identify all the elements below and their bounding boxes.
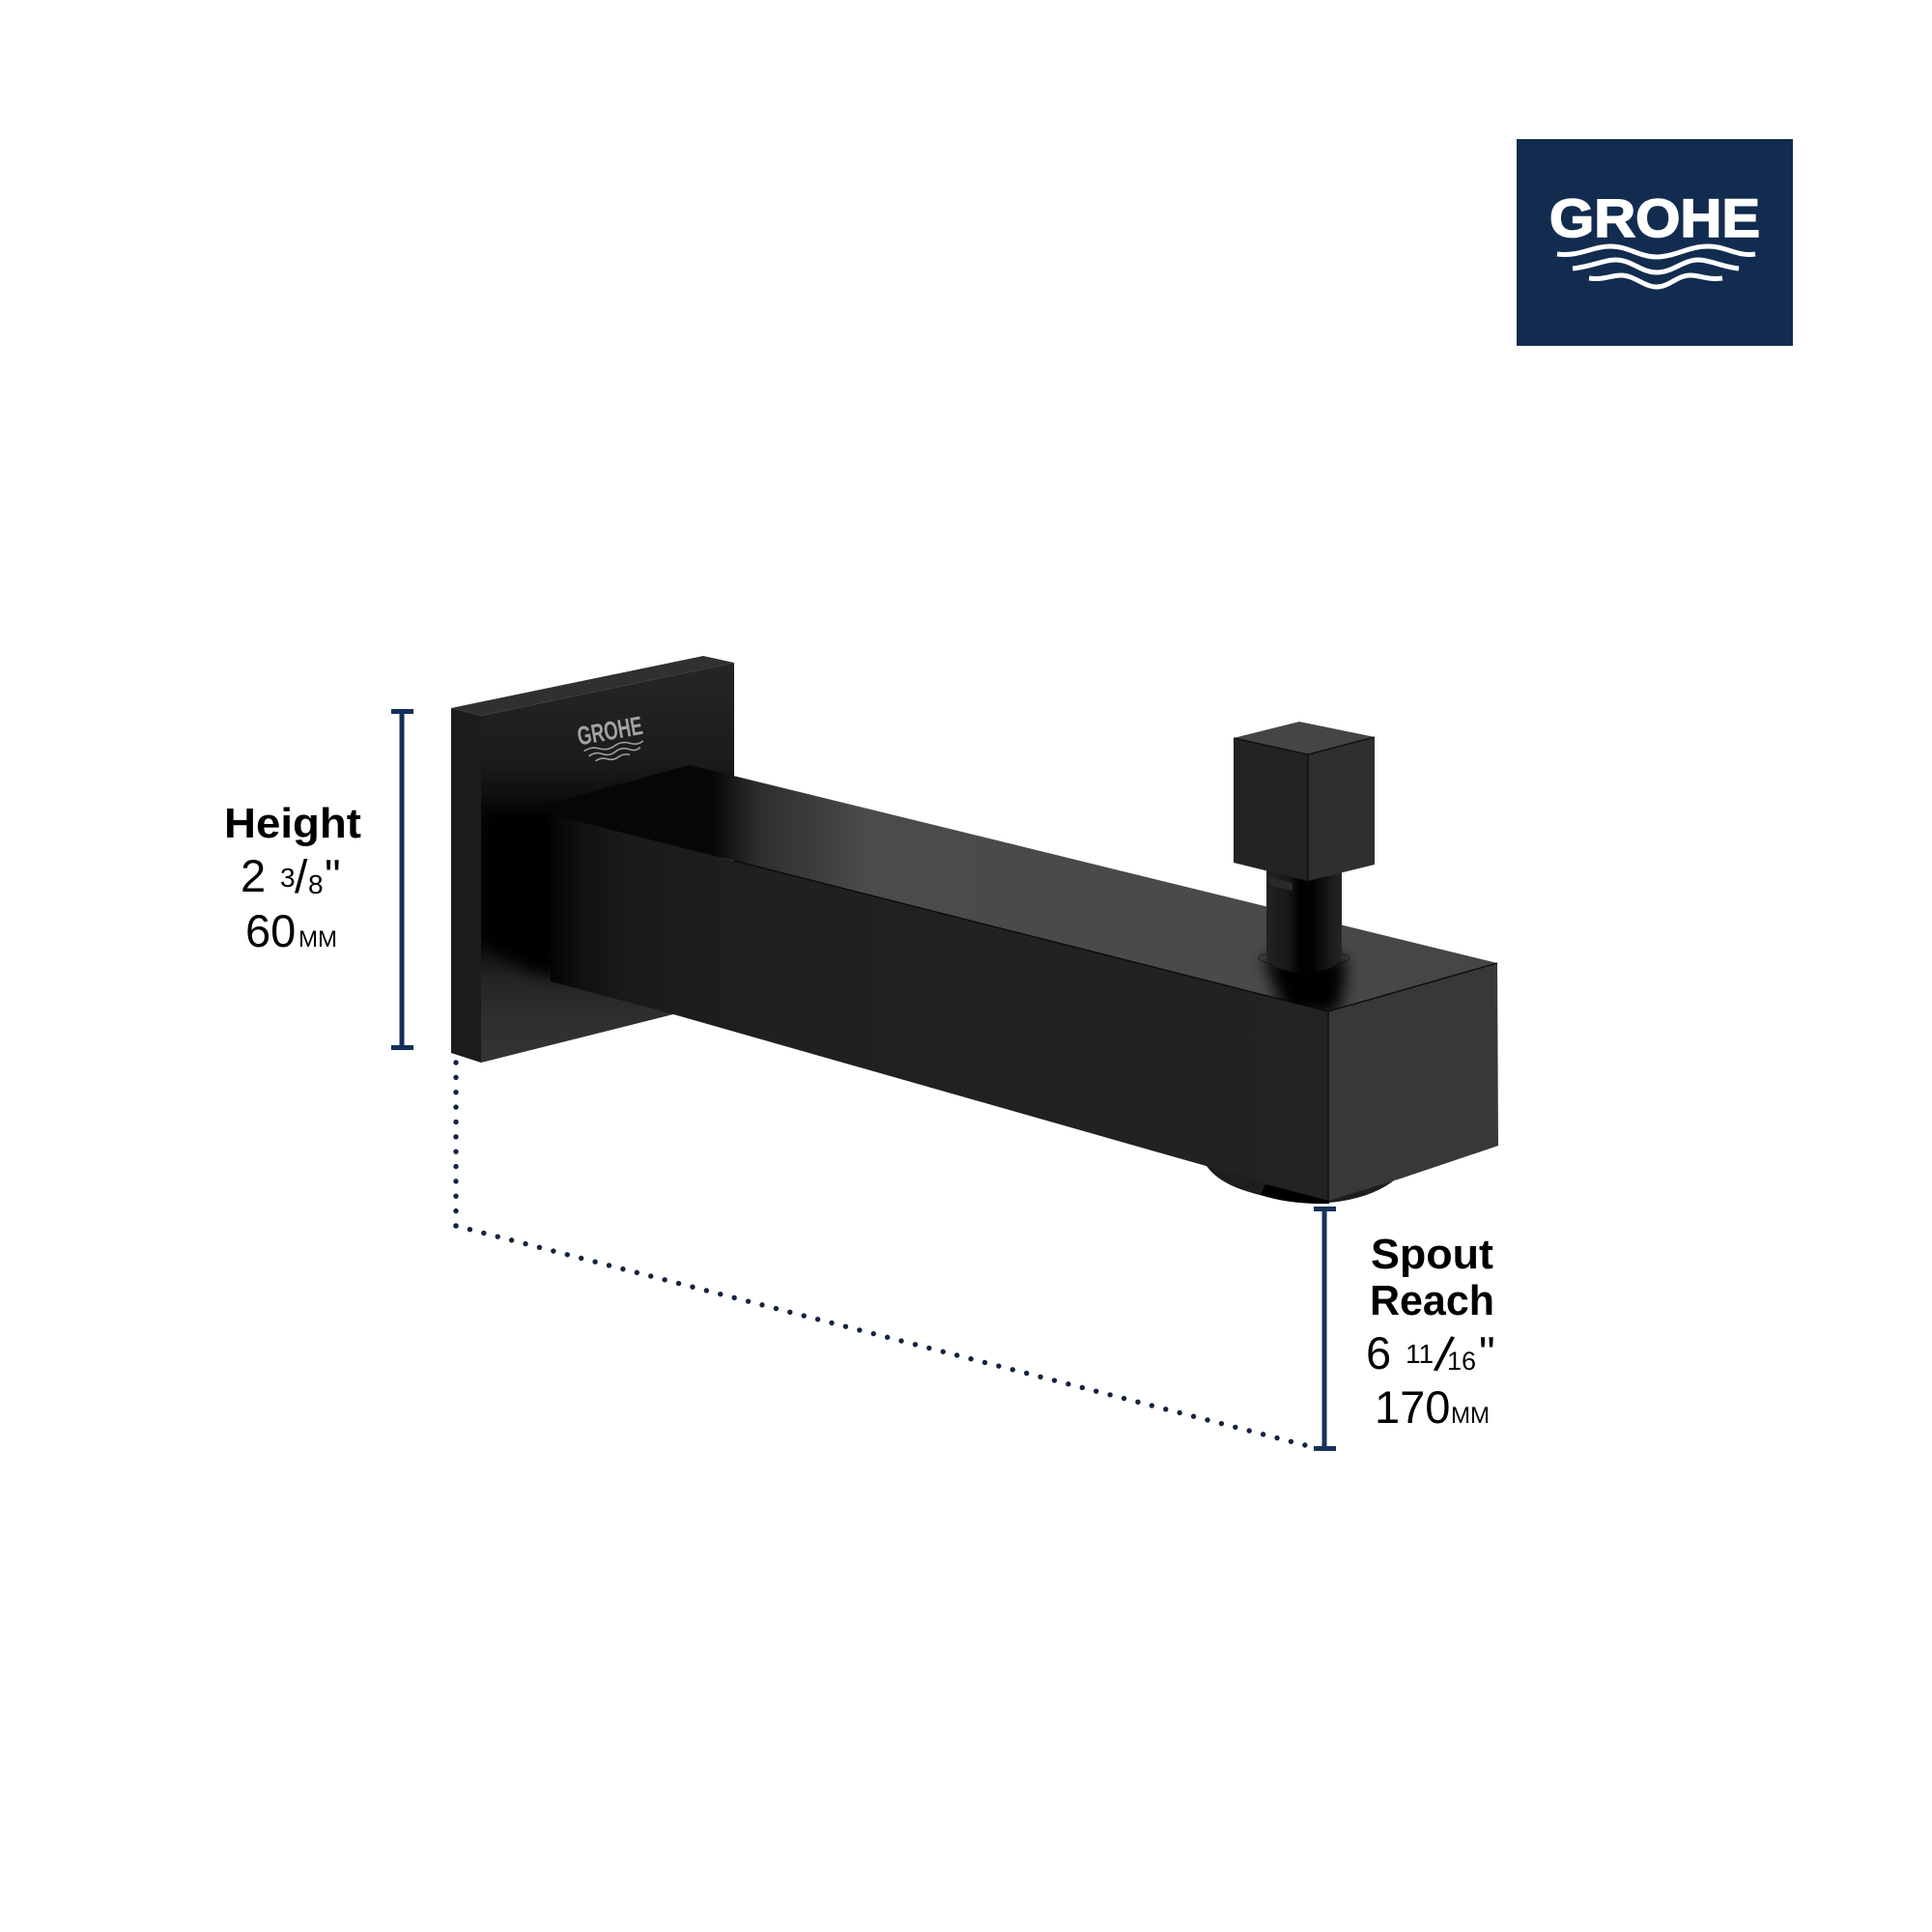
logo: GROHE navy badge (1517, 139, 1793, 346)
handle cube right face (1308, 737, 1375, 881)
second title line: Reach (1370, 1277, 1494, 1324)
plate engraved logo (575, 711, 647, 765)
diverter stem (1266, 860, 1342, 974)
height inches: / (295, 852, 308, 903)
spout reach dimension bar (1314, 1207, 1336, 1451)
spout reach inches: 11 (1406, 1339, 1434, 1369)
height inches: 2 (241, 850, 266, 901)
stem notch (1269, 877, 1293, 891)
height label: Height (224, 800, 361, 847)
spout reach millimetres: MM (1451, 1403, 1490, 1429)
height label (224, 800, 361, 956)
cube edge lines (1234, 737, 1375, 881)
height inches: " (325, 850, 341, 901)
handle cube left face (1234, 738, 1308, 881)
handle cube top (1234, 722, 1375, 754)
nozzle dark inner (1261, 1184, 1329, 1204)
spout nozzle underside (1203, 1150, 1403, 1203)
spout reach millimetres: 170 (1375, 1381, 1450, 1433)
dotted reach guide line (456, 1063, 1306, 1445)
plate side edge (451, 708, 481, 1063)
spout reach label: Spout (1371, 1231, 1493, 1278)
logo waves (1557, 246, 1755, 287)
plate top edge (451, 656, 734, 716)
plate engraved logo: GROHE (575, 711, 645, 751)
spout reach inches: 6 (1366, 1327, 1391, 1378)
faucet: wall plate and tub spout (451, 656, 1498, 1204)
spout reach inches: " (1479, 1327, 1495, 1378)
stem shadow on top face (1264, 956, 1346, 1014)
spout reach label (1366, 1231, 1495, 1433)
spout top face (529, 765, 1497, 1011)
fraction slash: / (1432, 1326, 1457, 1384)
logo wordmark: GROHE (1549, 187, 1760, 248)
height millimetres: 60 (245, 905, 296, 956)
spout reach inches: 16 (1447, 1347, 1476, 1376)
height inches: 3 (280, 863, 296, 893)
spout edge lines (734, 861, 1497, 1201)
wall plate front face (481, 663, 734, 1063)
stem base ring (1259, 951, 1350, 966)
height dimension bar (391, 709, 413, 1050)
plate shadow from spout (481, 810, 560, 980)
height millimetres: MM (298, 926, 337, 952)
height inches: 8 (308, 869, 324, 899)
spout end face (1328, 963, 1498, 1201)
spout side face (551, 814, 1328, 1201)
